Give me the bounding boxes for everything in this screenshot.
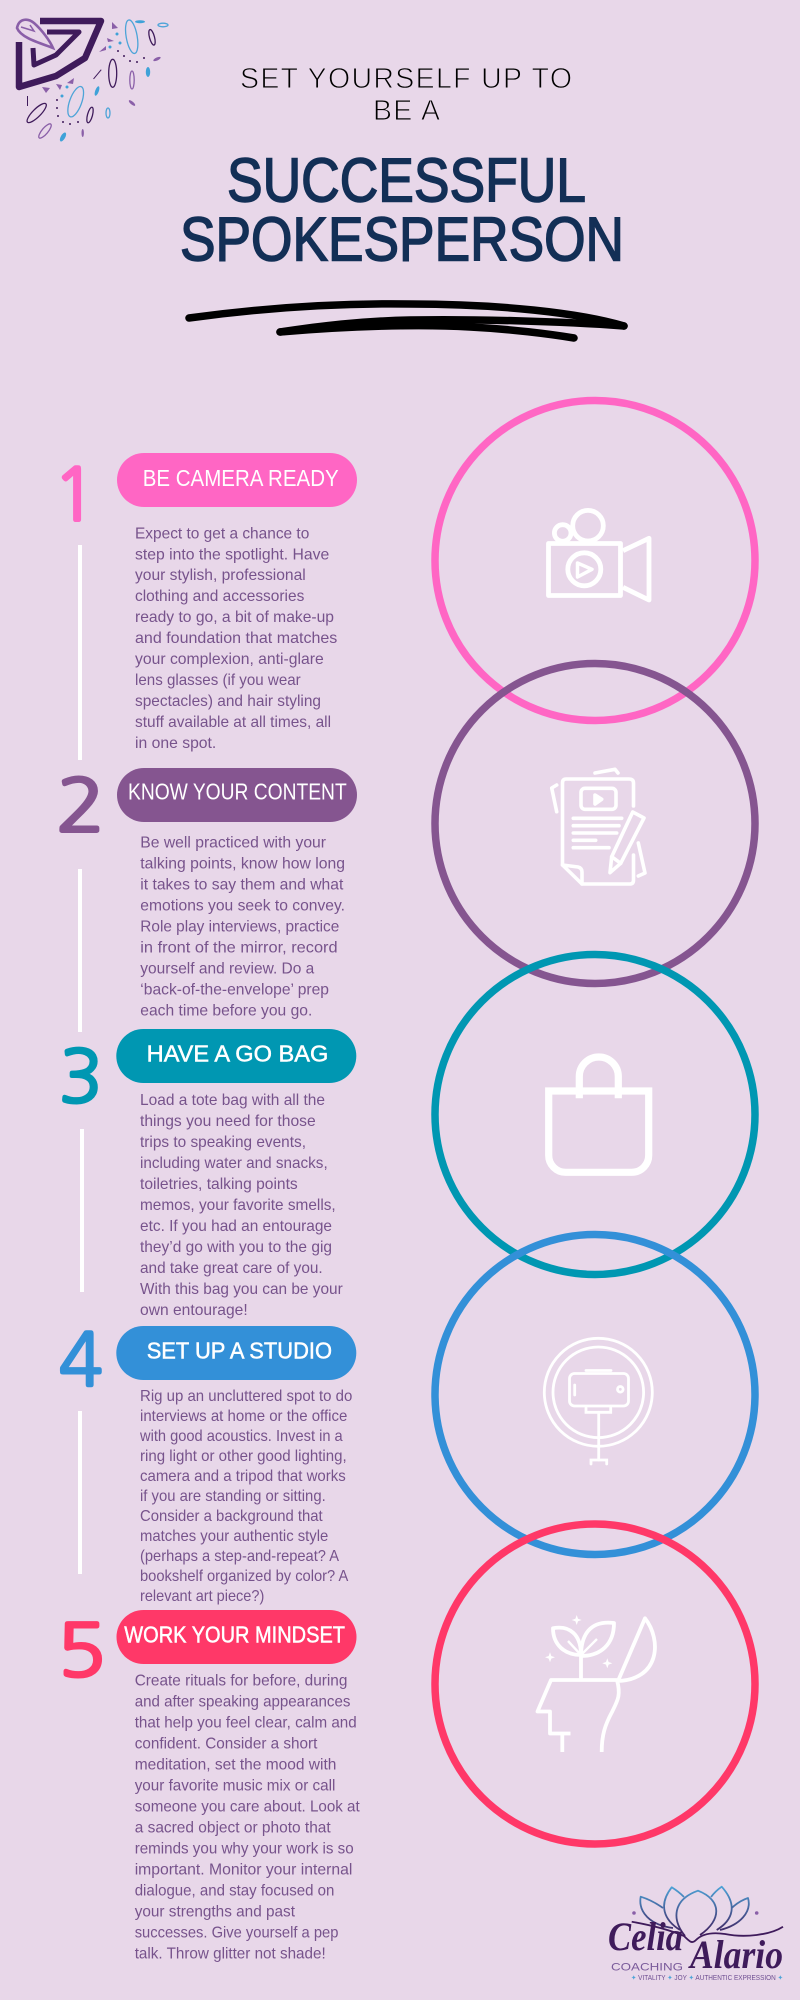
title: intro line (240, 63, 572, 127)
step 2: know your content (56, 768, 357, 1032)
logo: top-left shield and droplets (17, 19, 168, 142)
text block 1: your stylish, professional (135, 567, 306, 584)
icon: tote bag (549, 1057, 649, 1172)
icon: head with growing plant (538, 1615, 655, 1752)
text block 4 (139, 1388, 352, 1605)
text block 5: reminds you why your work is so (135, 1841, 354, 1858)
text block 5: talk. Throw glitter not shade! (135, 1946, 326, 1963)
text block 5: that help you feel clear, calm and (135, 1715, 357, 1732)
title: main heading (180, 146, 624, 274)
step 3: have a go bag (59, 1029, 356, 1319)
text block 1: spectacles) and hair styling (135, 693, 321, 710)
text block 2: Role play interviews, practice (140, 918, 339, 935)
connector line 2 (78, 869, 82, 1032)
pill 2: KNOW YOUR CONTENT (128, 778, 347, 804)
text block 5: important. Monitor your internal (135, 1862, 352, 1879)
connector line 1 (78, 545, 82, 760)
text block 5: successes. Give yourself a pep (135, 1925, 338, 1942)
text block 2: Be well practiced with your (140, 834, 327, 851)
circle 5: red (435, 1524, 755, 1844)
number 5: 5 (57, 1616, 106, 1688)
pill 5: WORK YOUR MINDSET (124, 1621, 345, 1647)
text block 1: clothing and accessories (135, 588, 304, 605)
text block 3: things you need for those (140, 1113, 316, 1130)
pill 5 (116, 1610, 356, 1664)
step 4: set up a studio (59, 1324, 356, 1605)
text block 3: own entourage! (140, 1302, 248, 1319)
text block 4: relevant art piece?) (140, 1588, 264, 1605)
pill 4: SET UP A STUDIO (147, 1337, 332, 1363)
connector line 4 (78, 1411, 82, 1574)
text block 4: Consider a background that (140, 1508, 323, 1525)
text block 3: memos, your favorite smells, (140, 1197, 336, 1214)
text block 5: and after speaking appearances (135, 1694, 350, 1711)
text block 2 (140, 834, 345, 1019)
logo: Celia Alario Coaching: COACHING (611, 1962, 683, 1974)
brush underline (189, 304, 624, 338)
number 1: 1 (53, 460, 97, 532)
circle 4: blue (435, 1234, 755, 1554)
text block 2: ‘back-of-the-envelope’ prep (140, 981, 329, 998)
text block 4: bookshelf organized by color? A (140, 1568, 349, 1585)
wordmark: Celia (608, 1914, 683, 1959)
title: intro line: SET YOURSELF UP TO (240, 63, 572, 95)
text block 1: Expect to get a chance to (135, 525, 309, 542)
tagline: ✦ VITALITY ✦ JOY ✦ AUTHENTIC EXPRESSION ✦ (631, 1974, 783, 1982)
text block 1 (135, 525, 337, 752)
logo: Celia Alario Coaching (608, 1887, 783, 1982)
text block 4: interviews at home or the office (140, 1408, 347, 1425)
text block 2: talking points, know how long (140, 855, 345, 872)
text block 3: they’d go with you to the gig (140, 1239, 332, 1256)
pill 3: HAVE A GO BAG (147, 1040, 328, 1066)
text block 4: Rig up an uncluttered spot to do (140, 1388, 352, 1405)
title: intro line: BE A (373, 95, 440, 127)
pill 3 (116, 1029, 356, 1083)
circle 1: pink (435, 400, 755, 720)
logo: Celia Alario Coaching: Alario (687, 1932, 783, 1977)
pill 1 (117, 453, 357, 507)
text block 3: and take great care of you. (140, 1260, 323, 1277)
text block 3: With this bag you can be your (140, 1281, 343, 1298)
pill 2 (117, 768, 357, 822)
pill 4 (116, 1326, 356, 1380)
text block 1: stuff available at all times, all (135, 714, 331, 731)
text block 3 (140, 1092, 343, 1319)
text block 5: your strengths and past (135, 1904, 296, 1921)
text block 5: confident. Consider a short (135, 1736, 318, 1753)
step 5: work your mindset (57, 1610, 360, 1963)
number 3: 3 (59, 1042, 103, 1114)
text block 2: it takes to say them and what (140, 876, 344, 893)
lotus flower (640, 1887, 749, 1936)
circle 3: teal (435, 954, 755, 1274)
text block 2: each time before you go. (140, 1002, 312, 1019)
text block 5 (135, 1673, 360, 1963)
text block 3: etc. If you had an entourage (140, 1218, 332, 1235)
text block 1: and foundation that matches (135, 630, 337, 647)
pill 1: BE CAMERA READY (143, 465, 339, 491)
title: main heading: SUCCESSFUL (227, 146, 586, 216)
text block 4: matches your authentic style (140, 1528, 328, 1545)
text block 2: emotions you seek to convey. (140, 897, 345, 914)
text block 1: ready to go, a bit of make-up (135, 609, 334, 626)
text block 5: a sacred object or photo that (135, 1820, 331, 1837)
icon: video camera (548, 510, 649, 600)
text block 4: camera and a tripod that works (140, 1468, 346, 1485)
connector line 3 (80, 1129, 84, 1292)
text block 3: toiletries, talking points (140, 1176, 298, 1193)
text block 5: Create rituals for before, during (135, 1673, 347, 1690)
text block 3: including water and snacks, (140, 1155, 328, 1172)
text block 5: dialogue, and stay focused on (135, 1883, 334, 1900)
icon: ring light with phone (544, 1338, 652, 1464)
text block 1: step into the spotlight. Have (135, 546, 329, 563)
text block 5: someone you care about. Look at (135, 1799, 360, 1816)
text block 2: in front of the mirror, record (140, 939, 338, 956)
flourish line (632, 1922, 783, 1942)
text block 4: with good acoustics. Invest in a (139, 1428, 343, 1445)
text block 1: your complexion, anti-glare (135, 651, 324, 668)
text block 1: lens glasses (if you wear (135, 672, 301, 689)
text block 5: meditation, set the mood with (135, 1757, 336, 1774)
title: main heading: SPOKESPERSON (180, 206, 624, 274)
icon: script with pencil (552, 769, 645, 884)
text block 1: in one spot. (135, 735, 216, 752)
text block 4: if you are standing or sitting. (140, 1488, 326, 1505)
text block 3: Load a tote bag with all the (140, 1092, 325, 1109)
number 4: 4 (59, 1324, 103, 1396)
step 1: be camera ready (53, 453, 357, 760)
text block 5: your favorite music mix or call (135, 1778, 335, 1795)
text block 2: yourself and review. Do a (140, 960, 314, 977)
text block 4: ring light or other good lighting, (140, 1448, 347, 1465)
text block 3: trips to speaking events, (140, 1134, 306, 1151)
circle 2: purple (435, 664, 755, 984)
text block 4: (perhaps a step-and-repeat? A (140, 1548, 339, 1565)
number 2: 2 (56, 771, 105, 843)
